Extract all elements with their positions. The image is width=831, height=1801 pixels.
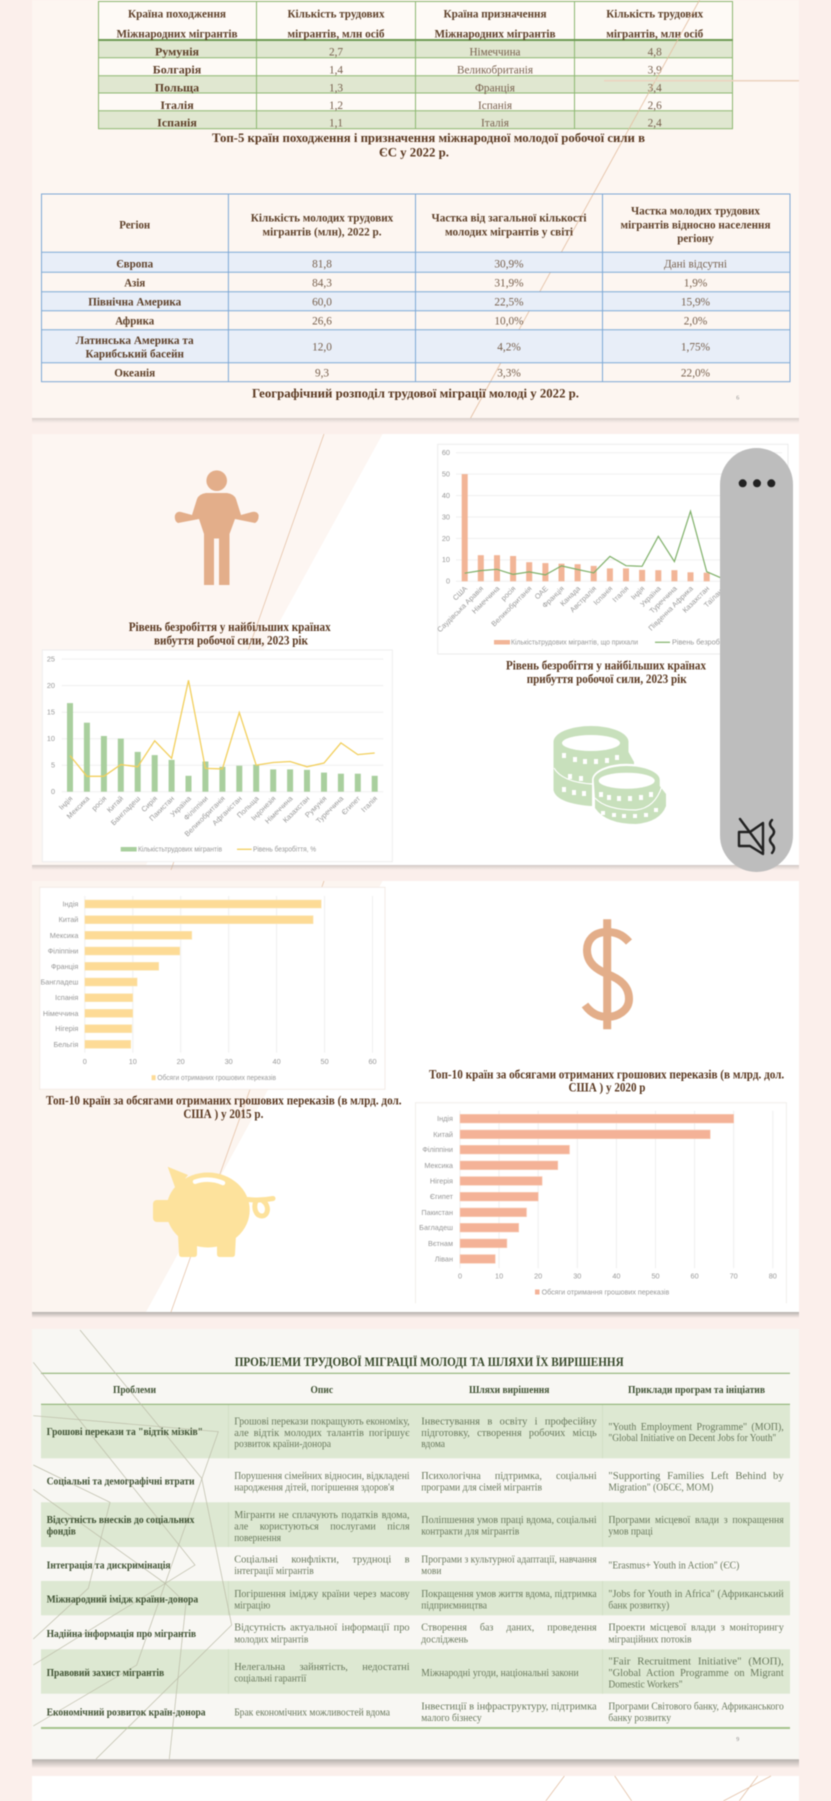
chart: departure countries bars and line: 5: [51, 760, 55, 770]
chart: arrival countries bars and line: Казахстан: [681, 584, 711, 615]
chart: arrival countries bars and line: Рівень безробіття, %: [672, 638, 743, 646]
table: regional distribution: 9,3: [315, 368, 329, 380]
chart: remittances 2020: Обсяги отримання грошових переказів: [542, 1288, 669, 1296]
chart: remittances 2015: Нігерія: [55, 1024, 78, 1033]
table column: programme examples: банку розвитку: [608, 1713, 672, 1724]
table column: solutions: досліджень: [421, 1634, 468, 1646]
table column: solutions: Інвестиції в інфраструктуру, підтримка: [421, 1702, 597, 1712]
icon: muted speaker: [739, 819, 774, 854]
table column: programme examples: "Global Action Programme on Migrant: [608, 1668, 784, 1679]
chart: remittances 2020: 70: [730, 1272, 738, 1280]
chart: arrival countries bars and line: 50: [442, 470, 450, 478]
table: regional distribution: 4,2%: [497, 342, 521, 354]
chart: departure countries bars and line: Рівень безробіття, %: [253, 844, 316, 854]
chart: remittances 2015: 60: [368, 1057, 377, 1066]
title: problems table: ПРОБЛЕМИ ТРУДОВОЇ МІГРАЦІЇ МОЛОДІ ТА ШЛЯХИ ЇХ ВИРІШЕННЯ: [235, 1355, 624, 1369]
chart: remittances 2015: Бельгія: [53, 1040, 78, 1049]
table: regional distribution: 10,0%: [494, 316, 524, 328]
table: regional distribution: Африка: [115, 314, 154, 328]
chart: remittances 2015: Мексика: [50, 931, 79, 940]
table: regional distribution: мігрантів відносно населення: [620, 217, 771, 231]
table column: description: інтеграції мігрантів: [234, 1566, 314, 1577]
caption: arrival countries: Рівень безробіття у найбільших країнах: [506, 657, 706, 672]
page number 9: 9: [736, 1737, 739, 1743]
table column: programme examples: "Fair Recruitment Initiative" (МОП),: [608, 1656, 784, 1668]
chart: arrival countries bars and line: ОАЕ: [533, 584, 550, 601]
chart: remittances 2015: 30: [225, 1057, 233, 1066]
table column: solutions: Створення баз даних, проведення: [421, 1622, 597, 1634]
table: regional distribution: Частка від загальної кількості: [432, 211, 587, 225]
table: top-5 countries: Великобританія: [457, 64, 533, 76]
table: top-5 countries: Кількість трудових: [606, 7, 703, 21]
table column: programme examples: Domestic Workers": [608, 1680, 683, 1690]
chart: departure countries bars and line: Польща: [235, 793, 261, 820]
table column: description: молодих мігрантів: [234, 1634, 308, 1646]
table: top-5 countries: Міжнародних мігрантів: [434, 26, 556, 40]
caption: remittances 2015: США ) у 2015 р.: [183, 1106, 263, 1121]
table: regional distribution: Частка молодих трудових: [631, 204, 760, 218]
panel: slide 2 unemployment charts: [32, 434, 799, 870]
icon: three dots: [739, 479, 775, 487]
table: top-5 countries: 3,4: [648, 82, 662, 94]
table: regional distribution: молодих мігрантів у світі: [445, 224, 574, 238]
table column: programme examples: банк розвитку): [608, 1600, 670, 1612]
caption: remittances 2015: [46, 1092, 402, 1121]
table: column headers: Шляхи вирішення: [469, 1384, 549, 1396]
table column: description: Порушення сімейних відносин, відкладені: [234, 1471, 410, 1482]
table: regional distribution: Північна Америка: [88, 295, 181, 309]
chart: departure countries bars and line: Пакистан: [147, 794, 176, 823]
chart: departure countries bars and line: Німеччина: [263, 793, 295, 826]
chart: arrival countries bars and line: Італія: [610, 584, 630, 604]
table: top-5 countries: Іспанія: [157, 116, 197, 130]
table column: programme examples: Програми Світового банку, Африканського: [608, 1702, 784, 1712]
chart: remittances 2015: 0: [83, 1057, 87, 1066]
table: regional distribution: 84,3: [312, 277, 332, 289]
table: regional distribution: 60,0: [312, 297, 332, 309]
panel: slide 3 remittances: [32, 881, 799, 1318]
table column: solutions: мови: [421, 1566, 442, 1577]
chart: remittances 2015: 10: [129, 1057, 137, 1066]
chart: departure countries bars and line: Туреччина: [314, 793, 346, 825]
chart: remittances 2020: 10: [495, 1272, 503, 1280]
chart: departure countries bars and line: Україна: [168, 793, 194, 819]
table column: description: Соціальні конфлікти, трудноці в: [234, 1554, 410, 1566]
chart: remittances 2020: 60: [691, 1272, 699, 1280]
caption: arrival countries: прибуття робочої сили, 2023 рік: [527, 671, 687, 686]
table column: description: Грошові перекази покращують економіку,: [234, 1416, 410, 1428]
table column: solutions: підготовку, створення робочих місць: [421, 1428, 597, 1439]
table column: problems: Соціальні та демографічні втрати: [47, 1476, 194, 1488]
chart: arrival countries bars and line: Україна: [638, 583, 663, 609]
chart: departure countries bars and line: 10: [47, 734, 55, 743]
chart: arrival countries bars and line: Індія: [629, 584, 647, 602]
page number 6: 6: [736, 396, 739, 402]
chart: remittances 2020: Пакистан: [421, 1208, 453, 1217]
caption: top-5 table: ЄС у 2022 р.: [379, 144, 449, 160]
table column: programme examples: "Youth Employment Programme" (МОП),: [608, 1422, 784, 1433]
chart: remittances 2020: Вєтнам: [428, 1239, 453, 1248]
table column: solutions: [421, 1416, 597, 1724]
chart: arrival countries bars and line: Іспанія: [591, 584, 614, 607]
chart: remittances 2015: [40, 887, 385, 1089]
table column: programme examples: "Jobs for Youth in Africa" (Африканський: [608, 1589, 784, 1600]
table: top-5 countries: 2,6: [648, 100, 662, 112]
table column: description: але відтік молодих талантів погіршує: [234, 1428, 410, 1439]
table column: problems: Відсутність внесків до соціальних: [47, 1514, 195, 1526]
table: top-5 countries: Країна призначення: [444, 7, 547, 21]
table column: solutions: Покращення умов життя вдома, підтримка: [421, 1589, 597, 1600]
table: top-5 countries: 1,1: [329, 118, 343, 130]
table: regional distribution: 22,5%: [494, 297, 524, 309]
chart: departure countries bars and line: Єгипет: [340, 794, 363, 817]
table column: programme examples: "Supporting Families Left Behind by: [608, 1471, 785, 1482]
table column: solutions: малого бізнесу: [421, 1713, 482, 1724]
table: regional distribution: мігрантів (млн), 2022 р.: [262, 224, 382, 238]
chart: departure countries bars and line: Великобританія: [183, 794, 227, 838]
caption: remittances 2015: Топ-10 країн за обсягами отриманих грошових переказів (в млрд. дол.: [46, 1092, 402, 1108]
chart: remittances 2020: Єгипет: [430, 1192, 454, 1201]
chart: arrival countries bars and line: [435, 444, 788, 654]
table: regional distribution: Океанія: [114, 366, 156, 380]
chart: remittances 2015: 50: [321, 1057, 329, 1066]
table: top-5 countries: 1,3: [329, 82, 343, 94]
icon: dollar sign: [585, 919, 629, 1029]
chart: remittances 2020: 80: [769, 1272, 777, 1280]
table: top-5 countries: Італія: [160, 98, 194, 112]
panel: slide 5 fragment: [32, 1776, 799, 1801]
caption: departure countries: вибуття робочої сили, 2023 рік: [154, 632, 308, 648]
chart: remittances 2020: 0: [458, 1272, 462, 1280]
table column: description: народження дітей, погіршення здоров'я: [234, 1482, 394, 1494]
table: top-5 countries: мігрантів, млн осіб: [288, 26, 384, 40]
caption: top-5 table: Топ-5 країн походження і призначення міжнародної молодої робочої сили в: [212, 130, 645, 145]
chart: arrival countries bars and line: 60: [442, 448, 450, 457]
chart: remittances 2020: Філіппіни: [422, 1145, 453, 1154]
table column: solutions: підприємництва: [421, 1600, 487, 1612]
table column: description: Погіршення іміджу країни через масову: [234, 1589, 410, 1600]
table column: solutions: вдома: [421, 1439, 445, 1450]
table column: programme examples: Програми місцевої влади з покращення: [608, 1515, 784, 1526]
chart: remittances 2015: Іспанія: [55, 993, 78, 1002]
table: regional distribution: Азія: [124, 275, 146, 289]
table column: solutions: Інвестування в освіту і професійну: [421, 1416, 597, 1428]
chart: departure countries bars and line: Китай: [105, 794, 125, 814]
chart: remittances 2020: Мексика: [424, 1161, 454, 1170]
table: top-5 countries: 3,9: [648, 64, 662, 76]
table: column headers: Проблеми: [113, 1384, 157, 1396]
chart: remittances 2015: Філіппіни: [48, 946, 78, 956]
chart: departure countries bars and line: Італія: [359, 794, 379, 814]
chart: departure countries bars and line: Казахстан: [281, 794, 311, 825]
table: top-5 countries: Німеччина: [470, 47, 520, 59]
chart: arrival countries bars and line: Великобританія: [489, 584, 534, 628]
table column: description: Нелегальна зайнятість, недостатні: [234, 1662, 410, 1673]
table column: programme examples: міграційних потоків: [608, 1634, 692, 1646]
table column: problems: Надійна інформація про мігрантів: [47, 1628, 196, 1640]
table: top-5 countries: Країна походження: [128, 7, 226, 21]
table: regional distribution: Кількість молодих трудових: [251, 211, 393, 225]
table: column headers: [113, 1384, 765, 1396]
table: top-5 countries: мігрантів, млн осіб: [606, 26, 703, 40]
icon: person shrugging: [175, 470, 259, 585]
table: top-5 countries: Польща: [155, 80, 199, 94]
chart: departure countries bars and line: Кількістьтрудових мігрантів: [138, 844, 222, 854]
chart: departure countries bars and line: Бангладеш: [109, 794, 142, 827]
table: regional distribution: Регіон: [119, 217, 150, 231]
chart: arrival countries bars and line: 0: [446, 576, 450, 586]
chart: departure countries bars and line: 0: [51, 787, 55, 796]
chart: arrival countries bars and line: Франція: [540, 584, 566, 610]
icon: piggy bank: [153, 1167, 273, 1257]
table column: programme examples: Проекти місцевої влади з моніторингу: [608, 1622, 784, 1634]
table: regional distribution: Латинська Америка та: [76, 333, 194, 347]
table column: problems: Економічний розвиток країн-донора: [47, 1706, 206, 1718]
table column: solutions: Психологічна підтримка, соціальні: [421, 1471, 597, 1482]
table column: description: Брак економічних можливостей вдома: [234, 1708, 390, 1718]
chart: departure countries bars and line: [42, 650, 392, 862]
chart: remittances 2015: Франція: [51, 962, 78, 971]
table: column headers: Приклади програм та ініціатив: [628, 1384, 765, 1396]
chart: departure countries bars and line: Румунія: [303, 794, 328, 819]
caption: remittances 2020: США ) у 2020 р: [568, 1080, 646, 1094]
table: column headers: Опис: [311, 1384, 333, 1396]
table: regional distribution: Європа: [116, 257, 153, 271]
table column: description: розвиток країни-донора: [234, 1439, 331, 1450]
table column: solutions: програми для сімей мігрантів: [421, 1482, 542, 1494]
table: top-5 countries: Кількість трудових: [288, 7, 384, 21]
floating toolbar pill: [720, 448, 793, 872]
chart: remittances 2020: 40: [612, 1272, 620, 1280]
chart: remittances 2015: Китай: [59, 915, 78, 924]
chart: departure countries bars and line: 20: [47, 681, 55, 690]
table column: description: але користуються послугами після: [234, 1522, 410, 1532]
chart: remittances 2015: Індія: [63, 900, 78, 908]
table: top-5 countries: 2,4: [648, 118, 662, 130]
table column: programme examples: Migration" (ОБСЄ, МОМ): [608, 1482, 714, 1494]
table: regional distribution: 1,75%: [681, 342, 711, 354]
chart: departure countries bars and line: 25: [47, 654, 55, 664]
table column: description: повернення: [234, 1533, 281, 1544]
chart: remittances 2015: Німеччина: [43, 1009, 79, 1018]
table column: programme examples: "Erasmus+ Youth in Action" (ЄС): [608, 1560, 740, 1572]
chart: arrival countries bars and line: Канада: [558, 583, 583, 608]
table: regional distribution: 22,0%: [681, 368, 711, 380]
chart: departure countries bars and line: Індія: [57, 794, 74, 812]
table column: programme examples: [608, 1422, 785, 1724]
table: regional distribution: [41, 194, 790, 382]
chart: arrival countries bars and line: 40: [442, 491, 450, 500]
icon: coins: [554, 726, 668, 826]
table column: description: міграцію: [234, 1600, 270, 1612]
table column: problems: Міжнародний імідж країни-донора: [47, 1594, 199, 1606]
decorative polylines: [33, 1330, 232, 1759]
chart: remittances 2020: [416, 1103, 786, 1303]
table column: description: соціальні гарантії: [234, 1674, 306, 1684]
table: top-5 countries: 2,7: [329, 47, 343, 59]
table column: solutions: Програми з культурної адаптації, навчання: [421, 1554, 597, 1566]
table column: solutions: Міжнародні угоди, національні закони: [421, 1668, 579, 1679]
chart: arrival countries bars and line: Саудівська Аравія: [435, 584, 485, 634]
caption: regional table: Географічний розподіл трудової міграції молоді у 2022 р.: [252, 386, 579, 400]
chart: departure countries bars and line: Філіппіни: [182, 794, 210, 822]
chart: arrival countries bars and line: США: [451, 584, 469, 602]
chart: remittances 2020: 30: [573, 1272, 581, 1280]
table column: description: [234, 1416, 410, 1718]
table column: description: Мігранти не сплачують податків вдома,: [234, 1510, 410, 1521]
table: regional distribution: регіону: [677, 231, 714, 245]
chart: arrival countries bars and line: Кількістьтрудових мігрантів, що прихали: [511, 638, 638, 646]
table: regional distribution: Дані відсутні: [664, 259, 727, 271]
table column: solutions: Поліпшення умов праці вдома, соціальні: [421, 1515, 597, 1526]
caption: arrival countries: [506, 657, 706, 686]
table: regional distribution: 30,9%: [494, 259, 524, 271]
chart: arrival countries bars and line: 10: [442, 555, 450, 564]
table: top-5 countries: Румунія: [155, 45, 200, 59]
table: top-5 countries: Італія: [481, 118, 509, 130]
chart: remittances 2020: Китай: [433, 1130, 453, 1139]
table: regional distribution: 12,0: [312, 342, 332, 354]
table: top-5 countries: 1,2: [329, 100, 343, 112]
chart: arrival countries bars and line: Таїланд: [702, 584, 728, 609]
table: regional distribution: Карибський басейн: [85, 347, 184, 361]
chart: departure countries bars and line: Мексика: [65, 793, 92, 821]
panel: slide 4 problems table: [32, 1329, 799, 1768]
table: top-5 countries: Болгарія: [153, 62, 202, 76]
chart: remittances 2020: Нігерія: [430, 1176, 453, 1186]
chart: arrival countries bars and line: Південна Африка: [646, 583, 696, 633]
chart: arrival countries bars and line: Німеччина: [470, 583, 502, 616]
table: top-5 countries: 4,8: [648, 47, 662, 59]
caption: departure countries: [129, 619, 331, 648]
table: top-5 countries: Міжнародних мігрантів: [116, 26, 238, 40]
chart: remittances 2020: 50: [651, 1272, 660, 1280]
table: top-5 countries: [98, 1, 733, 130]
table column: problems: Грошові перекази та "відтік мізків": [47, 1426, 203, 1438]
table: regional distribution: 26,6: [312, 316, 332, 328]
table column: programme examples: умов праці: [608, 1526, 653, 1538]
table column: problems: фондів: [47, 1526, 76, 1538]
table column: problems: Правовий захист мігрантів: [47, 1667, 164, 1679]
table column: programme examples: "Global Initiative on Decent Jobs for Youth": [608, 1433, 776, 1444]
chart: departure countries bars and line: Індонезія: [249, 794, 278, 822]
chart: remittances 2020: Індія: [437, 1114, 453, 1123]
chart: remittances 2020: Багладеш: [419, 1223, 453, 1232]
table column: problems: [47, 1426, 206, 1718]
table: regional distribution: 15,9%: [681, 297, 711, 309]
table: row backgrounds: [41, 1373, 790, 1728]
table: regional distribution: 3,3%: [497, 368, 521, 380]
table: top-5 countries: Іспанія: [478, 100, 512, 112]
panel: slide 1 tables: [32, 0, 799, 423]
table column: problems: Інтеграція та дискримінація: [47, 1560, 171, 1572]
caption: top-5 table: [212, 130, 645, 160]
table column: description: Відсутність актуальної інформації про: [234, 1622, 410, 1634]
chart: remittances 2015: Обсяги отриманих грошових переказів: [157, 1073, 276, 1082]
table: top-5 countries: 1,4: [329, 64, 343, 76]
chart: arrival countries bars and line: 20: [442, 534, 450, 543]
table: regional distribution: 81,8: [312, 259, 332, 271]
chart: departure countries bars and line: 15: [47, 708, 55, 716]
table: regional distribution: 2,0%: [684, 316, 708, 328]
chart: departure countries bars and line: росія: [90, 794, 108, 813]
table: top-5 countries: Франція: [475, 82, 515, 94]
chart: remittances 2015: Бангладеш: [41, 978, 79, 986]
chart: departure countries bars and line: Сирія: [139, 794, 159, 814]
chart: remittances 2015: 40: [273, 1057, 281, 1066]
chart: arrival countries bars and line: Туреччина: [648, 583, 679, 615]
chart: remittances 2015: 20: [177, 1057, 185, 1066]
table: regional distribution: 1,9%: [684, 277, 708, 289]
caption: departure countries: Рівень безробіття у найбільших країнах: [129, 619, 331, 634]
chart: remittances 2020: Ліван: [435, 1254, 453, 1264]
caption: remittances 2020: [429, 1066, 784, 1094]
chart: remittances 2020: 20: [534, 1272, 542, 1280]
chart: arrival countries bars and line: 30: [442, 512, 450, 522]
chart: arrival countries bars and line: росія: [499, 584, 518, 603]
table: regional distribution: 31,9%: [494, 277, 524, 289]
chart: arrival countries bars and line: Австралія: [568, 584, 598, 614]
table column: solutions: контракти для мігрантів: [421, 1526, 519, 1538]
chart: departure countries bars and line: Афганістан: [210, 794, 244, 827]
caption: remittances 2020: Топ-10 країн за обсягами отриманих грошових переказів (в млрд. дол.: [429, 1066, 784, 1081]
